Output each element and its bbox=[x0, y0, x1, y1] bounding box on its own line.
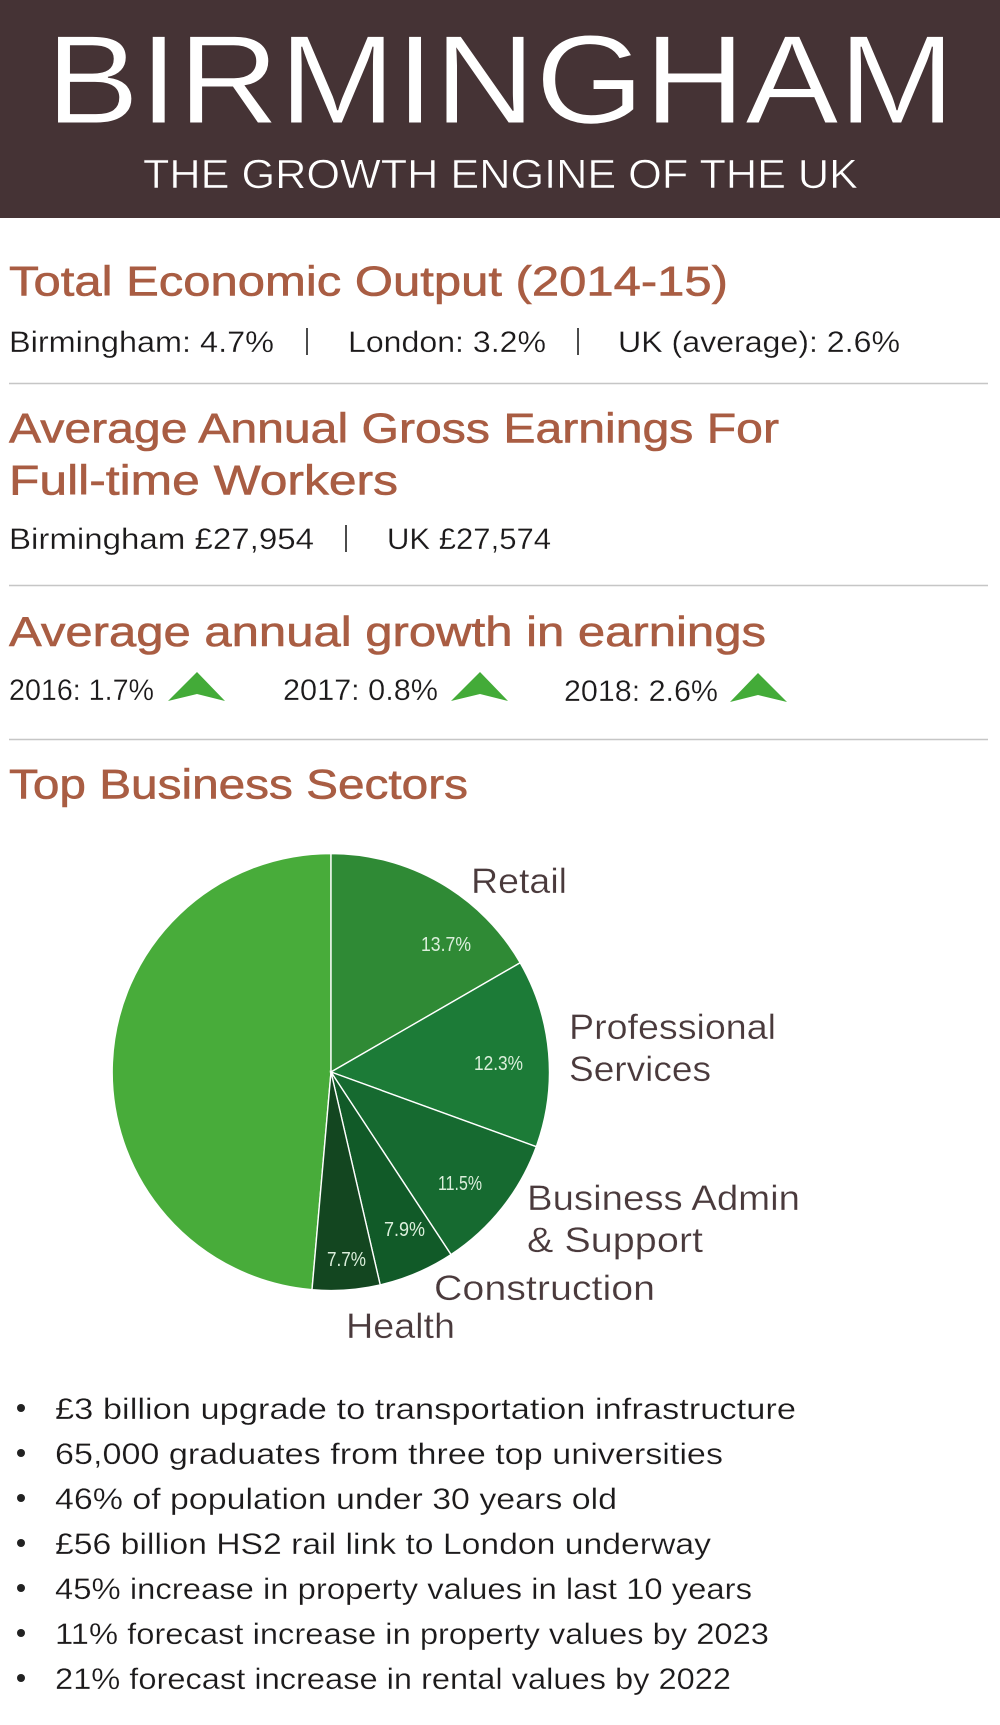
panel: average annual gross earnings bbox=[9, 404, 779, 556]
icon: up arrow 2017 bbox=[451, 672, 508, 701]
label: professional services: Services bbox=[569, 1050, 711, 1089]
pie values: 7.9% bbox=[384, 1219, 425, 1241]
stat: 2017: 2017: 0.8% bbox=[283, 674, 438, 707]
pie values: 12.3% bbox=[474, 1053, 523, 1075]
label: construction: Construction bbox=[434, 1269, 655, 1308]
bullet list: 45% increase in property values in last 10 years bbox=[55, 1573, 752, 1606]
panel: top business sectors bbox=[9, 760, 800, 1346]
stats: Birmingham £27,954 bbox=[9, 523, 314, 556]
panel: average annual growth in earnings bbox=[9, 608, 787, 708]
heading: Average annual growth in earnings bbox=[9, 608, 766, 655]
bullet list: 46% of population under 30 years old bbox=[55, 1483, 617, 1516]
stats: London: 3.2% bbox=[348, 326, 546, 359]
pie values: 13.7% bbox=[421, 934, 471, 956]
header banner bbox=[0, 0, 1000, 218]
label: professional services: Professional bbox=[569, 1008, 776, 1047]
icon: up arrow 2016 bbox=[168, 672, 225, 701]
stats bbox=[9, 523, 551, 556]
heading: Top Business Sectors bbox=[9, 760, 468, 808]
stats: UK £27,574 bbox=[387, 523, 551, 556]
bullet list: £56 billion HS2 rail link to London underway bbox=[55, 1528, 711, 1561]
bullet list: 65,000 graduates from three top universities bbox=[55, 1438, 723, 1471]
pie values: 11.5% bbox=[438, 1173, 482, 1195]
label: health: Health bbox=[346, 1307, 455, 1346]
bullet list: 11% forecast increase in property values by 2023 bbox=[55, 1618, 769, 1651]
stats: Birmingham: 4.7% bbox=[9, 326, 274, 359]
bullet list: £3 billion upgrade to transportation infrastructure bbox=[55, 1393, 796, 1426]
label: retail: Retail bbox=[471, 862, 567, 901]
stat: 2018: 2018: 2.6% bbox=[564, 675, 718, 708]
pie values bbox=[327, 934, 523, 1271]
pie values: 7.7% bbox=[327, 1249, 366, 1271]
bullet list: 21% forecast increase in rental values by 2022 bbox=[55, 1663, 731, 1696]
title: BIRMINGHAM bbox=[46, 9, 955, 150]
pie chart bbox=[112, 853, 549, 1291]
bullet list bbox=[17, 1393, 796, 1696]
heading: Full-time Workers bbox=[9, 456, 398, 504]
label: business admin and support: & Support bbox=[527, 1221, 703, 1260]
stats: UK (average): 2.6% bbox=[618, 326, 900, 359]
panel: total economic output bbox=[9, 258, 900, 359]
heading bbox=[9, 404, 779, 504]
subtitle: THE GROWTH ENGINE OF THE UK bbox=[143, 151, 858, 197]
label: professional services bbox=[569, 1008, 776, 1089]
label: business admin and support: Business Admin bbox=[527, 1179, 800, 1218]
label: business admin and support bbox=[527, 1179, 800, 1260]
heading: Average Annual Gross Earnings For bbox=[9, 404, 779, 452]
heading: Total Economic Output (2014-15) bbox=[9, 258, 728, 304]
stats bbox=[9, 326, 900, 359]
icon: up arrow 2018 bbox=[730, 673, 787, 702]
stat: 2016: 2016: 1.7% bbox=[9, 674, 154, 707]
